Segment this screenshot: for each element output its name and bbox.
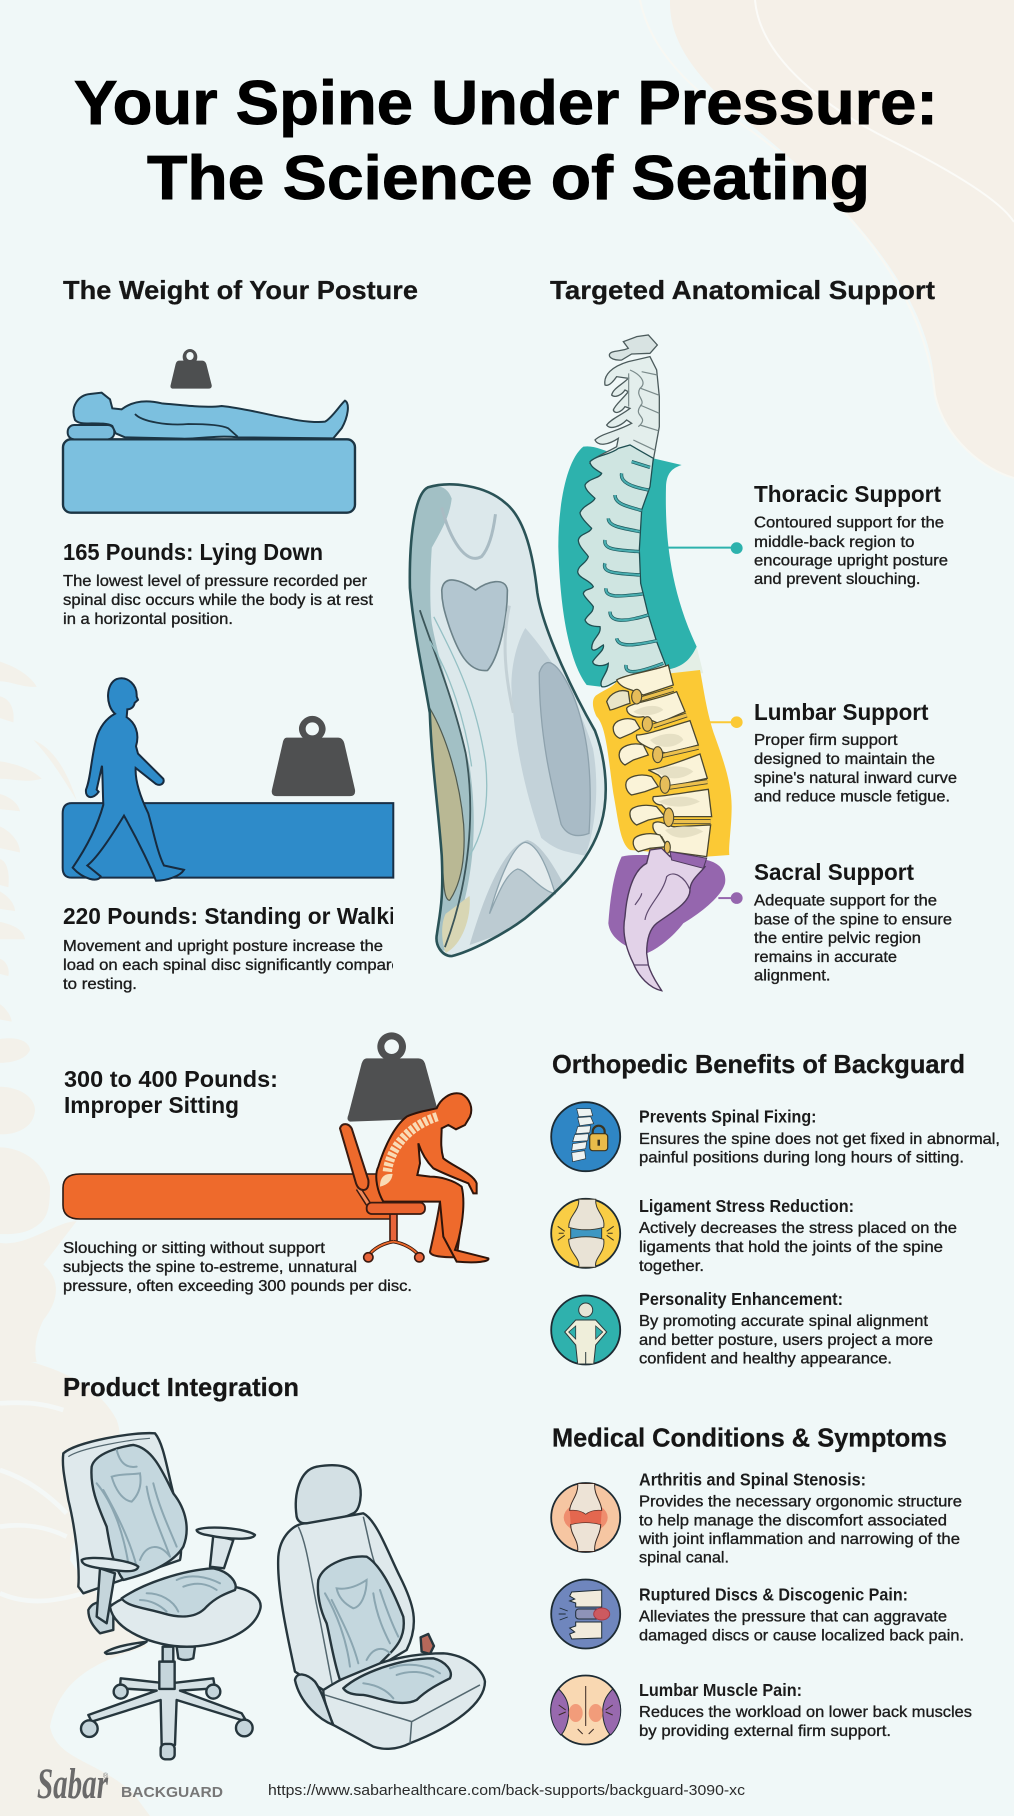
illustration: person lying on mattress with small weight — [63, 349, 355, 513]
text block: thoracic support: middle-back region to — [754, 534, 915, 551]
text block: prevents spinal fixing: painful positions during long hours of sitting. — [639, 1150, 964, 1166]
text block: sacral support: Adequate support for the — [754, 892, 937, 910]
text block: lumbar muscle pain — [639, 1680, 972, 1740]
icon: spine with padlock — [551, 1102, 620, 1171]
text block: sacral support: the entire pelvic region — [754, 930, 921, 947]
heading: product integration: Product Integration — [63, 1372, 299, 1402]
illustration: lumbar cushion — [410, 484, 606, 956]
heading: weight of posture: The Weight of Your Posture — [63, 275, 418, 305]
illustration: thoracic spine with teal support — [558, 335, 703, 687]
text block: lumbar muscle pain: by providing external firm support. — [639, 1723, 891, 1740]
icon: lumbar muscle pain — [551, 1676, 621, 1744]
text block: sacral support — [754, 859, 952, 984]
text block: ligament stress reduction: Actively decreases the stress placed on the — [639, 1220, 957, 1237]
text block: ligament stress reduction: Ligament Stress Reduction: — [639, 1196, 854, 1216]
icon: inflamed knee — [551, 1483, 620, 1552]
panel: product integration — [63, 1372, 485, 1759]
text block: ligament stress reduction — [639, 1196, 957, 1275]
text block: prevents spinal fixing: Prevents Spinal Fixing: — [639, 1106, 816, 1126]
text block: personality enhancement: confident and healthy appearance. — [639, 1350, 892, 1368]
text block: 220 pounds: load on each spinal disc significantly compared — [63, 957, 410, 974]
connector: lumbar — [708, 716, 743, 728]
heading: targeted support: Targeted Anatomical Support — [550, 275, 935, 305]
illustration: walking person with bar and weight — [63, 678, 393, 881]
title — [74, 69, 938, 213]
logo: sabar backguard: BACKGUARD — [121, 1784, 223, 1801]
text block: lumbar support: Lumbar Support — [754, 699, 929, 725]
text block: ruptured discs — [639, 1584, 964, 1644]
text block: sacral support: alignment. — [754, 968, 830, 984]
text block: thoracic support: encourage upright posture — [754, 552, 948, 570]
text block: lumbar muscle pain: Lumbar Muscle Pain: — [639, 1680, 802, 1700]
text block: 165 pounds — [63, 539, 374, 628]
panel: the weight of your posture — [63, 275, 488, 1295]
icon: confident person — [551, 1296, 620, 1364]
yellow lumbar zone — [593, 670, 732, 857]
text block: 300 to 400 pounds heading — [64, 1066, 278, 1118]
text block: improper sitting description: subjects the spine to-estreme, unnatural — [63, 1259, 357, 1276]
heading: orthopedic benefits: Orthopedic Benefits of Backguard — [552, 1049, 965, 1079]
text block: improper sitting description: Slouching or sitting without support — [63, 1240, 326, 1257]
illustration: orange load bar — [63, 1174, 392, 1219]
sacrum — [624, 848, 705, 991]
connector: sacral — [718, 892, 743, 904]
illustration: lumbar spine and sacrum with yellow and purple supports — [593, 665, 732, 991]
connectors — [667, 542, 743, 904]
text block: prevents spinal fixing: Ensures the spine does not get fixed in abnormal, — [639, 1131, 1000, 1148]
text block: ligament stress reduction: together. — [639, 1258, 704, 1275]
text block: 220 pounds: to resting. — [63, 976, 137, 993]
text block: arthritis — [638, 1470, 962, 1566]
text block: 220 pounds — [63, 907, 393, 993]
text block: arthritis: Provides the necessary orgonomic structure — [639, 1494, 962, 1510]
text block: personality enhancement: Personality Enhancement: — [639, 1289, 843, 1309]
text block: 165 pounds: The lowest level of pressure recorded per — [63, 573, 368, 590]
text block: arthritis: to help manage the discomfort associated — [639, 1512, 947, 1530]
text block: thoracic support: and prevent slouching. — [754, 571, 920, 588]
text block: arthritis: spinal canal. — [639, 1550, 729, 1566]
illustration: office chair with backguard — [63, 1433, 261, 1759]
text block: lumbar support: spine's natural inward curve — [754, 770, 957, 787]
logo: sabar backguard — [37, 1761, 223, 1808]
text block: sacral support: remains in accurate — [754, 949, 897, 966]
text block: 300 to 400 pounds heading: 300 to 400 Pounds: — [64, 1066, 278, 1092]
connector: thoracic — [667, 542, 743, 554]
text block: 300 to 400 pounds heading: Improper Sitting — [64, 1092, 239, 1118]
disc notches — [632, 689, 674, 853]
text block: 165 pounds: 165 Pounds: Lying Down — [63, 539, 323, 565]
text block: lumbar support — [754, 699, 957, 806]
text block: personality enhancement — [639, 1289, 933, 1368]
text block: 220 pounds: Movement and upright posture increase the — [63, 938, 383, 955]
lumbar discs — [640, 689, 711, 822]
text block: sacral support: base of the spine to ensure — [754, 912, 952, 928]
purple sacral zone — [608, 853, 725, 953]
text block: arthritis: with joint inflammation and narrowing of the — [638, 1531, 960, 1548]
text block: lumbar support: designed to maintain the — [754, 751, 935, 768]
source url: https://www.sabarhealthcare.com/back-supports/backguard-3090-xc — [268, 1782, 746, 1799]
panel: orthopedic benefits — [551, 1049, 1000, 1368]
lumbar vertebrae — [607, 665, 712, 857]
text block: sacral support: Sacral Support — [754, 859, 914, 885]
text block: ligament stress reduction: ligaments that hold the joints of the spine — [639, 1239, 943, 1256]
text block: thoracic support: Thoracic Support — [754, 481, 941, 507]
title: Your Spine Under Pressure: — [74, 69, 938, 138]
text block: 165 pounds: spinal disc occurs while the body is at rest — [63, 592, 374, 609]
icon: ruptured disc — [551, 1580, 620, 1648]
lumbar shading — [633, 706, 703, 838]
text block: lumbar support: Proper firm support — [754, 732, 898, 749]
text block: 220 pounds: 220 Pounds: Standing or Walking — [63, 903, 423, 929]
text block: personality enhancement: By promoting accurate spinal alignment — [639, 1313, 929, 1330]
text block: improper sitting description — [63, 1240, 412, 1295]
text block: personality enhancement: and better posture, users project a more — [639, 1332, 933, 1349]
text block: ruptured discs: damaged discs or cause localized back pain. — [639, 1628, 964, 1644]
icon: knee joint with ligament — [551, 1199, 620, 1268]
logo: sabar backguard: Sabar — [37, 1761, 109, 1808]
illustration: car seat with backguard — [278, 1465, 485, 1749]
logo: sabar backguard: ® — [103, 1772, 109, 1780]
illustration: slouched sitting person with chair and weight — [340, 1032, 488, 1262]
panel: medical conditions and symptoms — [551, 1422, 972, 1744]
text block: thoracic support — [754, 481, 948, 588]
text block: lumbar support: and reduce muscle fetigue. — [754, 788, 950, 806]
panel: targeted anatomical support — [410, 275, 957, 991]
text block: lumbar muscle pain: Reduces the workload on lower back muscles — [639, 1704, 972, 1721]
title: The Science of Seating — [147, 144, 870, 213]
text block: ruptured discs: Ruptured Discs & Discogenic Pain: — [639, 1584, 908, 1604]
text block: improper sitting description: pressure, often exceeding 300 pounds per disc. — [63, 1278, 412, 1295]
text block: ruptured discs: Alleviates the pressure that can aggravate — [639, 1608, 947, 1626]
text block: prevents spinal fixing — [639, 1106, 1000, 1166]
text block: arthritis: Arthritis and Spinal Stenosis: — [639, 1470, 866, 1490]
text block: 165 pounds: in a horizontal position. — [63, 611, 233, 628]
text block: thoracic support: Contoured support for the — [754, 514, 944, 532]
heading: medical conditions: Medical Conditions & Symptoms — [552, 1422, 947, 1452]
